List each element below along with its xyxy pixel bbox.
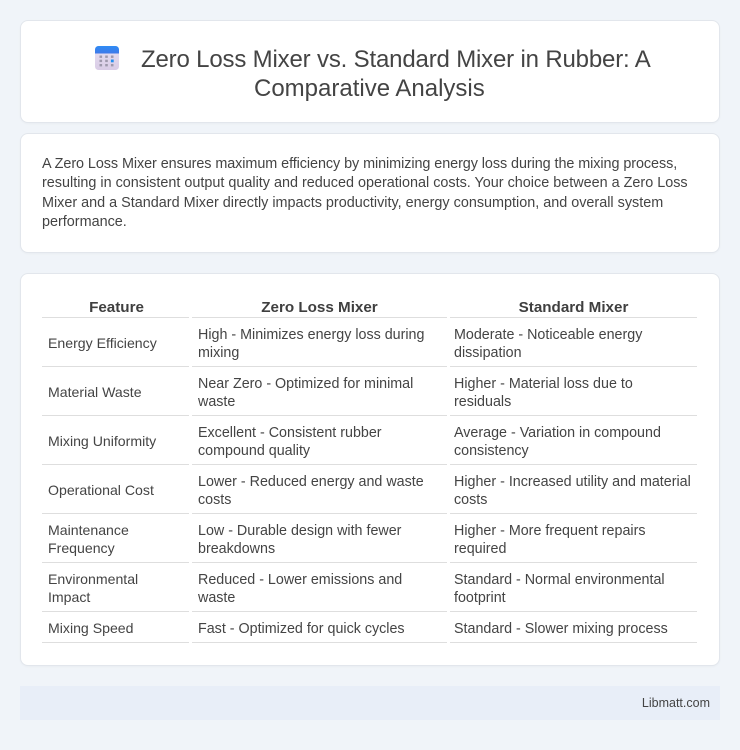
row: environmental impact: Impact <box>48 589 90 605</box>
row: environmental impact: Reduced - Lower emissions and <box>198 572 402 588</box>
intro text: A Zero Loss Mixer ensures maximum efficiency by minimizing energy loss during the mixing process, <box>42 156 677 172</box>
row: material waste: waste <box>198 394 235 410</box>
table header: Standard Mixer <box>519 299 628 316</box>
row: mixing speed <box>42 620 697 643</box>
title: Zero Loss Mixer vs. Standard Mixer in Rubber: A <box>141 46 651 73</box>
row: maintenance frequency: required <box>454 541 506 557</box>
row: material waste: residuals <box>454 394 511 410</box>
row: energy efficiency: Energy Efficiency <box>48 335 157 351</box>
row: operational cost <box>42 474 697 514</box>
row: material waste: Higher - Material loss due to <box>454 376 633 392</box>
row: operational cost: costs <box>454 492 487 508</box>
icon: calendar grid <box>95 46 119 70</box>
row: energy efficiency: High - Minimizes energy loss during <box>198 327 424 343</box>
footer text: Libmatt.com <box>642 696 710 710</box>
row: operational cost: Operational Cost <box>48 482 154 498</box>
table header <box>42 299 697 318</box>
row: energy efficiency: dissipation <box>454 345 522 361</box>
panel: introduction <box>20 133 720 253</box>
row: energy efficiency <box>42 327 697 367</box>
row: mixing uniformity: Excellent - Consistent rubber <box>198 425 382 441</box>
row: operational cost: costs <box>198 492 231 508</box>
row: environmental impact <box>42 571 697 612</box>
row: mixing speed: Standard - Slower mixing process <box>454 621 668 637</box>
footer bar <box>20 686 720 720</box>
row: energy efficiency: Moderate - Noticeable energy <box>454 327 642 343</box>
row: mixing uniformity: Mixing Uniformity <box>48 433 156 449</box>
intro text <box>42 156 688 230</box>
row: environmental impact: footprint <box>454 590 506 606</box>
table header: Zero Loss Mixer <box>261 299 378 316</box>
row: maintenance frequency: breakdowns <box>198 541 275 557</box>
intro text: performance. <box>42 214 127 230</box>
row: mixing uniformity: Average - Variation in compound <box>454 425 661 441</box>
row: maintenance frequency <box>42 522 697 563</box>
row: mixing uniformity: compound quality <box>198 443 310 459</box>
table header: Feature <box>89 299 144 316</box>
row: mixing speed: Mixing Speed <box>48 620 134 636</box>
row: material waste: Near Zero - Optimized for minimal <box>198 376 413 392</box>
title: Comparative Analysis <box>254 75 485 102</box>
panel: comparison table <box>20 273 720 666</box>
row: operational cost: Lower - Reduced energy and waste <box>198 474 424 490</box>
row: maintenance frequency: Frequency <box>48 540 115 556</box>
row: maintenance frequency: Maintenance <box>48 522 129 538</box>
row: maintenance frequency: Low - Durable design with fewer <box>198 523 401 539</box>
row: environmental impact: Environmental <box>48 571 138 587</box>
row: operational cost: Higher - Increased utility and material <box>454 474 691 490</box>
panel: title card <box>20 20 720 123</box>
row: mixing uniformity <box>42 425 697 465</box>
row: maintenance frequency: Higher - More frequent repairs <box>454 523 646 539</box>
row: energy efficiency: mixing <box>198 345 239 361</box>
intro text: resulting in consistent output quality and reduced operational costs. Your choice between a Zero Loss <box>42 175 688 191</box>
row: material waste: Material Waste <box>48 384 142 400</box>
intro text: Mixer and a Standard Mixer directly impacts productivity, energy consumption, and overall system <box>42 195 663 211</box>
row: mixing speed: Fast - Optimized for quick cycles <box>198 621 405 637</box>
row: mixing uniformity: consistency <box>454 443 529 459</box>
row: material waste <box>42 376 697 416</box>
row: environmental impact: Standard - Normal environmental <box>454 572 665 588</box>
title <box>141 46 651 102</box>
row: environmental impact: waste <box>198 590 235 606</box>
